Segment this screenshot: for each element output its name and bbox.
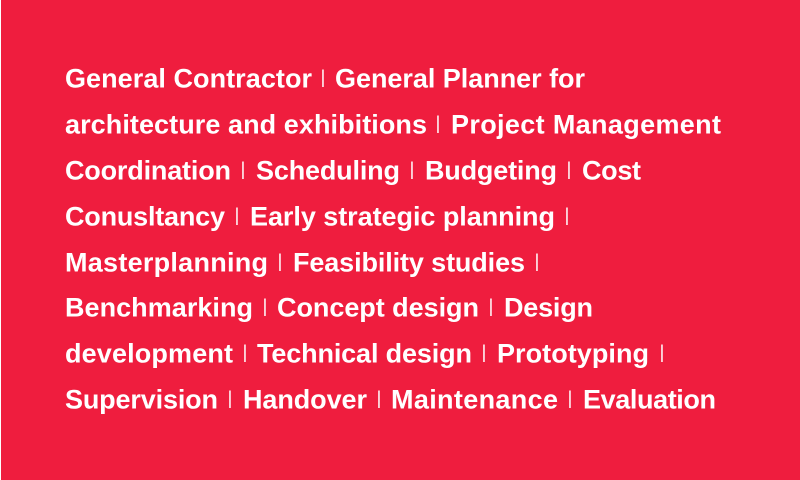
line 3 — [65, 156, 641, 186]
line 3: | — [410, 159, 414, 179]
line 2: Project Management — [451, 110, 721, 140]
line 4 — [65, 202, 569, 232]
line 3: | — [241, 159, 245, 179]
line 6: Benchmarking — [65, 292, 253, 322]
line 2 — [65, 110, 721, 140]
line 8: | — [568, 388, 572, 408]
line 1 — [65, 64, 585, 94]
line 4: Early strategic planning — [250, 202, 555, 232]
line 8: Maintenance — [391, 384, 558, 414]
line 3: | — [567, 159, 571, 179]
line 3: Cost — [582, 156, 641, 186]
line 8: Handover — [243, 384, 367, 414]
line 4: Conusltancy — [65, 202, 225, 232]
line 7: development — [65, 338, 233, 368]
line 1: | — [321, 67, 325, 87]
line 1: General Contractor — [65, 64, 312, 94]
line 3: Coordination — [65, 156, 231, 186]
line 7: Prototyping — [497, 338, 649, 368]
line 6: | — [263, 296, 267, 316]
line 5: | — [535, 251, 539, 271]
line 8 — [65, 384, 716, 414]
line 4: | — [235, 205, 239, 225]
line 6: Concept design — [277, 292, 479, 322]
line 6: Design — [504, 292, 593, 322]
line 5 — [65, 248, 539, 278]
line 8: Supervision — [65, 384, 218, 414]
line 7 — [65, 338, 664, 368]
line 5: | — [278, 251, 282, 271]
line 6 — [65, 292, 593, 322]
line 5: Masterplanning — [65, 248, 268, 278]
line 7: | — [482, 342, 486, 362]
line 6: | — [489, 296, 493, 316]
line 7: | — [660, 342, 664, 362]
line 8: | — [228, 388, 232, 408]
line 5: Feasibility studies — [293, 248, 525, 278]
line 8: Evaluation — [583, 384, 716, 414]
line 4: | — [565, 205, 569, 225]
line 8: | — [377, 388, 381, 408]
line 7: Technical design — [257, 338, 472, 368]
line 1: General Planner for — [335, 64, 585, 94]
line 2: | — [436, 113, 440, 133]
line 2: architecture and exhibitions — [65, 110, 427, 140]
line 7: | — [243, 342, 247, 362]
line 3: Scheduling — [256, 156, 400, 186]
line 3: Budgeting — [425, 156, 557, 186]
